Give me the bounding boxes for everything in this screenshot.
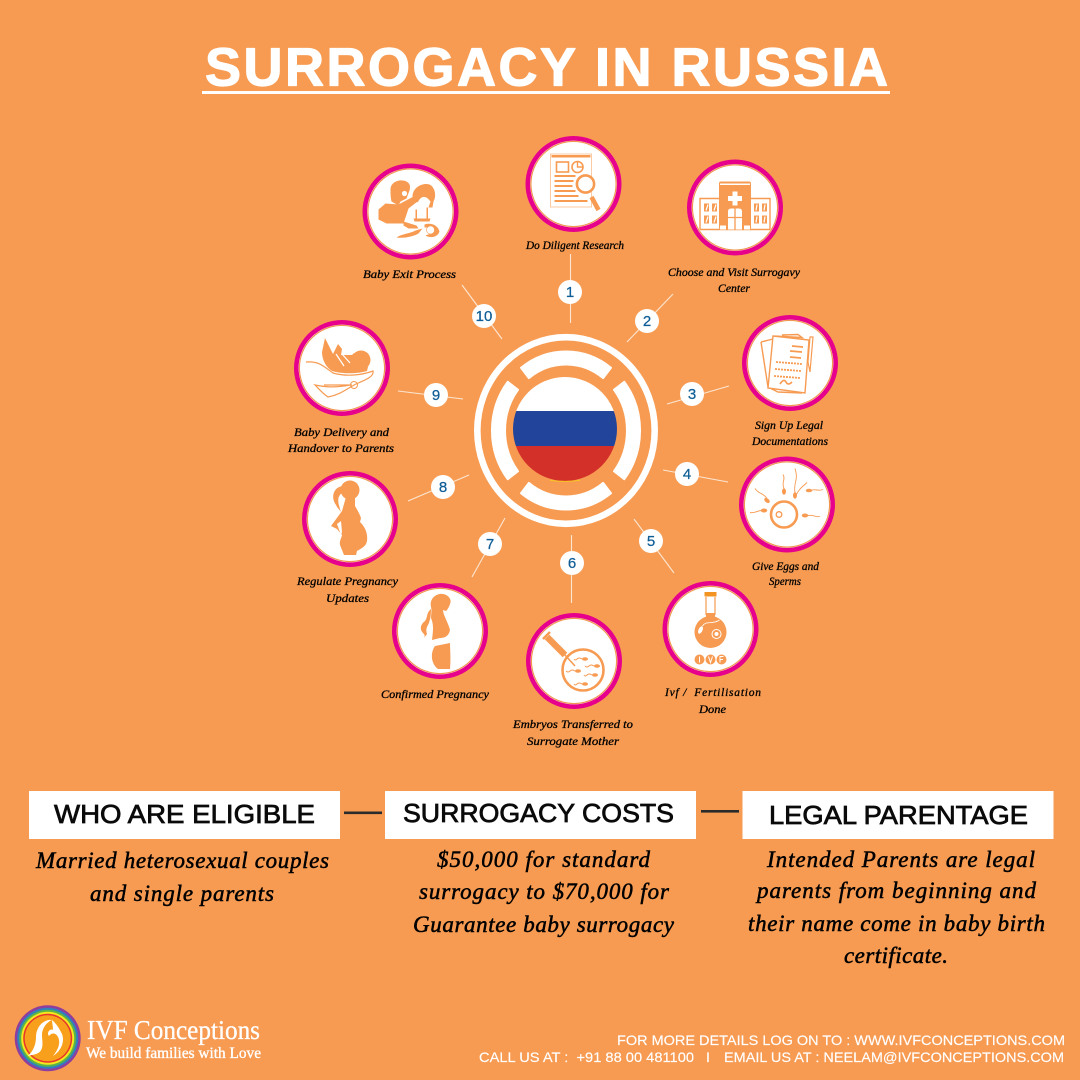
label: step 6: Surrogate Mother bbox=[527, 736, 620, 748]
connector 9: 9 bbox=[432, 387, 440, 404]
label: step 8 bbox=[296, 576, 399, 605]
label: step 4: Sperms bbox=[769, 576, 801, 588]
label: step 6 bbox=[512, 719, 633, 748]
panel: surrogacy costs: surrogacy to $70,000 for bbox=[419, 879, 670, 904]
label: step 5: Done bbox=[698, 704, 726, 716]
icon: egg and sperm bbox=[741, 459, 833, 550]
logo: IVF Conceptions: We build families with Love bbox=[86, 1045, 261, 1062]
panel: who are eligible: WHO ARE ELIGIBLE bbox=[54, 799, 315, 829]
label: step 7: Confirmed Pregnancy bbox=[381, 689, 490, 701]
label: step 4: Give Eggs and bbox=[752, 561, 819, 573]
connector 4 bbox=[663, 462, 728, 486]
footer contact details: FOR MORE DETAILS LOG ON TO : WWW.IVFCONCEPTIONS.COM bbox=[617, 1032, 1065, 1048]
icon: parents holding baby bbox=[365, 166, 456, 257]
label: step 2: Choose and Visit Surrogavy bbox=[668, 267, 801, 279]
panel: surrogacy costs: SURROGACY COSTS bbox=[403, 798, 674, 828]
label: step 9: Handover to Parents bbox=[287, 443, 395, 455]
label: step 9 bbox=[287, 427, 395, 455]
connector 8 bbox=[408, 475, 469, 501]
label: step 4 bbox=[752, 561, 819, 588]
connector dash: eligible to costs bbox=[344, 812, 382, 814]
connector 6: 6 bbox=[568, 555, 576, 572]
footer contact details: I bbox=[706, 1049, 710, 1065]
footer contact details: EMAIL US AT : NEELAM@IVFCONCEPTIONS.COM bbox=[724, 1049, 1064, 1065]
connector 10: 10 bbox=[476, 308, 492, 325]
panel: legal parentage: certificate. bbox=[844, 943, 948, 968]
connector 1: 1 bbox=[566, 284, 574, 301]
title: SURROGACY IN RUSSIA bbox=[205, 38, 888, 98]
footer contact details bbox=[479, 1032, 1065, 1065]
icon: baby in hand bbox=[296, 322, 388, 414]
panel: legal parentage: their name come in baby birth bbox=[748, 911, 1045, 936]
panel: who are eligible: and single parents bbox=[90, 881, 274, 906]
label: step 9: Baby Delivery and bbox=[294, 427, 389, 439]
label: step 2: Center bbox=[718, 283, 751, 295]
label: step 10: Baby Exit Process bbox=[363, 269, 457, 281]
panel: surrogacy costs: $50,000 for standard bbox=[437, 847, 650, 872]
icon: pregnant woman silhouette bbox=[304, 473, 396, 565]
label: step 3 bbox=[751, 420, 829, 448]
connector 4: 4 bbox=[683, 466, 691, 483]
connector 5 bbox=[634, 519, 674, 573]
footer contact details: CALL US AT : +91 88 00 481100 bbox=[479, 1049, 694, 1065]
icon: IVF flask bbox=[665, 583, 756, 675]
label: step 5 bbox=[664, 687, 761, 716]
connector 9 bbox=[398, 383, 463, 407]
logo: IVF Conceptions: IVF Conceptions bbox=[87, 1015, 260, 1045]
connector 1 bbox=[558, 254, 582, 323]
logo: IVF Conceptions bbox=[15, 1005, 261, 1071]
connector 3 bbox=[667, 382, 729, 406]
connector 2: 2 bbox=[643, 313, 651, 330]
icon: syringe and embryo dish bbox=[528, 615, 620, 707]
icon: hospital building bbox=[689, 162, 781, 253]
connector 7 bbox=[472, 518, 505, 577]
label: step 3: Documentations bbox=[751, 436, 829, 448]
connector 6 bbox=[560, 535, 584, 603]
connector 2 bbox=[627, 294, 673, 342]
panel: legal parentage: parents from beginning and bbox=[755, 878, 1036, 903]
panel: legal parentage: Intended Parents are legal bbox=[766, 847, 1035, 872]
central emblem: Russian flag with rings bbox=[477, 337, 655, 524]
connector 8: 8 bbox=[439, 479, 447, 496]
panel: surrogacy costs bbox=[385, 791, 696, 937]
panel: who are eligible bbox=[29, 791, 340, 906]
connector dash: costs to parentage bbox=[701, 810, 739, 813]
connector 3: 3 bbox=[688, 386, 696, 403]
icon: pregnant torso side silhouette bbox=[394, 585, 486, 677]
panel: legal parentage bbox=[742, 791, 1054, 968]
connector 10 bbox=[462, 285, 502, 339]
label: step 1: Do Diligent Research bbox=[525, 240, 624, 252]
label: step 2 bbox=[668, 267, 801, 295]
icon: legal documents bbox=[744, 317, 836, 409]
label: step 8: Updates bbox=[326, 593, 370, 605]
label: step 5: Ivf / Fertilisation bbox=[664, 687, 761, 699]
panel: surrogacy costs: Guarantee baby surrogacy bbox=[413, 912, 675, 937]
label: step 6: Embryos Transferred to bbox=[512, 719, 633, 731]
panel: who are eligible: Married heterosexual couples bbox=[35, 848, 329, 873]
label: step 8: Regulate Pregnancy bbox=[296, 576, 399, 588]
connector 7: 7 bbox=[486, 536, 494, 553]
panel: legal parentage: LEGAL PARENTAGE bbox=[769, 800, 1028, 830]
connector 5: 5 bbox=[647, 533, 655, 550]
label: step 3: Sign Up Legal bbox=[755, 420, 823, 432]
icon: research document with magnifier bbox=[528, 138, 619, 230]
